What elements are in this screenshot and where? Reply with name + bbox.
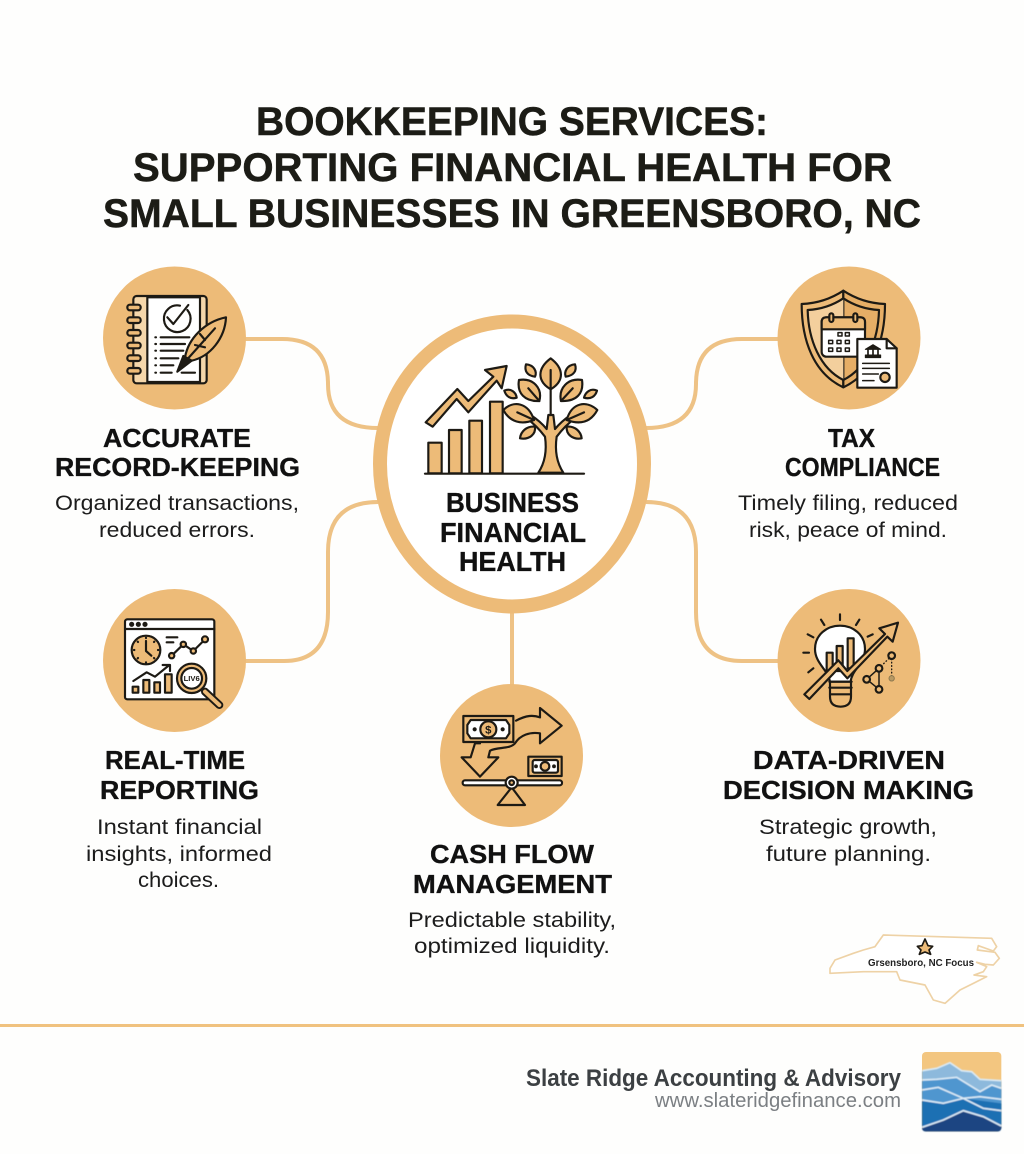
logo: blue mountains [922, 1052, 1001, 1131]
description [55, 491, 299, 542]
panel: central business financial health [380, 322, 644, 606]
heading: RECORD-KEEPING [55, 452, 300, 482]
connector lines [245, 339, 779, 686]
description: future planning. [766, 842, 931, 866]
footer: company name and website: Slate Ridge Accounting & Advisory [526, 1065, 902, 1092]
footer: company name and website [526, 1065, 902, 1112]
heading [413, 839, 612, 899]
central label [440, 487, 586, 577]
panel: cash flow management [408, 684, 616, 958]
central label: HEALTH [459, 546, 566, 577]
heading: REPORTING [100, 775, 259, 805]
icon: live dashboard: LIV6 [184, 674, 200, 683]
heading: MANAGEMENT [413, 869, 612, 899]
description: reduced errors. [99, 518, 255, 542]
description [738, 491, 958, 542]
description: Predictable stability, [408, 908, 616, 932]
heading: CASH FLOW [430, 839, 594, 869]
footer divider [0, 1024, 1024, 1027]
panel: accurate record-keeping [55, 266, 300, 542]
map: North Carolina with Greensboro focus: Grsensboro, NC Focus [868, 957, 974, 969]
icon: growth chart and tree [425, 358, 597, 474]
icon: money flow and balance [440, 684, 583, 827]
heading [723, 745, 974, 805]
title: SUPPORTING FINANCIAL HEALTH FOR [133, 146, 892, 190]
panel: data-driven decision making [723, 589, 974, 866]
description [86, 815, 272, 892]
description: risk, peace of mind. [749, 518, 947, 542]
central label: FINANCIAL [440, 517, 586, 548]
title [103, 100, 921, 236]
description [408, 908, 616, 958]
panel: real-time reporting [86, 589, 272, 892]
title: BOOKKEEPING SERVICES: [256, 100, 768, 144]
description [759, 815, 937, 866]
heading: COMPLIANCE [785, 452, 940, 482]
description: Organized transactions, [55, 491, 299, 515]
description: Strategic growth, [759, 815, 937, 839]
heading: DATA-DRIVEN [753, 745, 945, 775]
panel: tax compliance [738, 266, 958, 542]
heading: DECISION MAKING [723, 775, 974, 805]
icon: notebook and quill [103, 266, 246, 410]
description: Instant financial [97, 815, 262, 839]
icon: lightbulb and arrow [778, 589, 920, 732]
heading [100, 745, 259, 805]
heading: REAL-TIME [105, 745, 245, 775]
central label: BUSINESS [446, 487, 579, 518]
icon: money flow and balance: $ [485, 724, 492, 736]
description: insights, informed [86, 842, 272, 866]
icon: shield, calendar and document [778, 266, 920, 410]
footer: company name and website: www.slateridgefinance.com [654, 1090, 901, 1112]
icon: live dashboard [103, 589, 246, 732]
title: SMALL BUSINESSES IN GREENSBORO, NC [103, 192, 921, 236]
map: North Carolina with Greensboro focus [830, 935, 999, 1003]
heading: TAX [828, 423, 876, 453]
description: choices. [138, 868, 219, 892]
heading [55, 423, 300, 482]
description: optimized liquidity. [414, 934, 610, 958]
description: Timely filing, reduced [738, 491, 958, 515]
heading: ACCURATE [103, 423, 251, 453]
central ring [380, 322, 644, 606]
heading [785, 423, 940, 482]
